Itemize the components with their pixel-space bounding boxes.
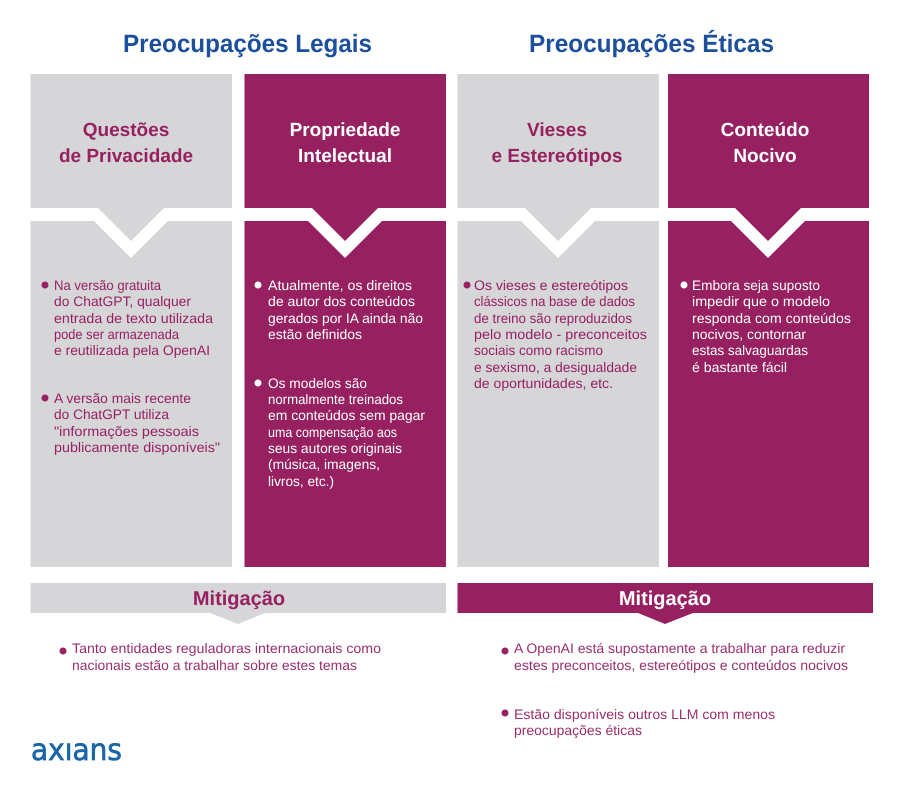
logo: axians: axians: [31, 733, 122, 768]
text block: ethical mitigation: estes preconceitos, estereótipos e conteúdos nocivos: [514, 658, 848, 673]
text block: intellectual property bullets: de autor dos conteúdos: [268, 294, 415, 309]
text block: legal mitigation: Tanto entidades reguladoras internacionais como: [72, 641, 381, 656]
panel: privacy issues: [30, 74, 232, 567]
text block: legal mitigation: [60, 641, 381, 673]
panel: biases and stereotypes: [458, 74, 659, 567]
text block: privacy bullets: pode ser armazenada: [54, 327, 179, 342]
title: legal concerns: Preocupações Legais: [123, 30, 372, 58]
text block: privacy bullets: "informações pessoais: [54, 424, 199, 439]
text block: harmful content bullets: impedir que o modelo: [692, 294, 830, 309]
heading: biases and stereotypes: e Estereótipos: [492, 146, 622, 167]
text block: intellectual property bullets: em conteúdos sem pagar: [268, 408, 425, 423]
text block: privacy bullets: do ChatGPT utiliza: [54, 407, 169, 422]
text block: intellectual property bullets: Atualmente, os direitos: [268, 278, 412, 293]
text block: biases bullets: pelo modelo - preconceitos: [474, 327, 647, 342]
text block: biases bullets: [464, 278, 647, 391]
text block: biases bullets: Os vieses e estereótipos: [474, 278, 628, 293]
text block: privacy bullets: publicamente disponíveis": [54, 440, 220, 455]
text block: intellectual property bullets: uma compensação aos: [268, 425, 397, 440]
text block: intellectual property bullets: gerados por IA ainda não: [268, 311, 423, 326]
text block: privacy bullets: [42, 278, 220, 455]
text block: intellectual property bullets: normalmente treinados: [268, 392, 403, 407]
text block: harmful content bullets: estas salvaguardas: [692, 343, 808, 358]
text block: intellectual property bullets: seus autores originais: [268, 441, 402, 456]
text block: ethical mitigation: preocupações éticas: [514, 723, 642, 738]
heading: intellectual property: Propriedade: [290, 120, 400, 141]
text block: intellectual property bullets: livros, etc.): [268, 474, 334, 489]
text block: biases bullets: de oportunidades, etc.: [474, 376, 613, 391]
text block: ethical mitigation: Estão disponíveis outros LLM com menos: [514, 707, 775, 722]
text block: ethical mitigation: A OpenAI está supostamente a trabalhar para reduzir: [514, 641, 845, 656]
text block: intellectual property bullets: Os modelos são: [268, 376, 367, 391]
heading: privacy issues: de Privacidade: [59, 146, 193, 167]
text block: privacy bullets: do ChatGPT, qualquer: [54, 294, 191, 309]
heading: biases and stereotypes: Vieses: [527, 120, 587, 141]
banner: legal mitigation: Mitigação: [193, 588, 285, 610]
text block: biases bullets: clássicos na base de dados: [474, 294, 635, 309]
text block: harmful content bullets: [680, 278, 851, 375]
text block: intellectual property bullets: estão definidos: [268, 327, 362, 342]
text block: biases bullets: de treino são reproduzidos: [474, 311, 632, 326]
banner: ethical mitigation: Mitigação: [619, 588, 711, 610]
banner: legal mitigation: [30, 583, 446, 624]
banner: ethical mitigation: [458, 583, 873, 624]
heading: intellectual property: Intelectual: [298, 146, 392, 167]
text block: privacy bullets: entrada de texto utilizada: [54, 311, 213, 326]
text block: harmful content bullets: é bastante fácil: [692, 360, 787, 375]
text block: intellectual property bullets: [254, 278, 425, 489]
panel: harmful content: [668, 74, 869, 567]
panel: intellectual property: [244, 74, 446, 567]
text block: privacy bullets: Na versão gratuita: [54, 278, 161, 293]
text block: ethical mitigation: [502, 641, 848, 738]
text block: privacy bullets: A versão mais recente: [54, 391, 191, 406]
heading: privacy issues: Questões: [83, 120, 169, 141]
text block: harmful content bullets: responda com conteúdos: [692, 311, 851, 326]
heading: harmful content: Conteúdo: [721, 120, 809, 141]
text block: privacy bullets: e reutilizada pela OpenAI: [54, 343, 210, 358]
heading: harmful content: Nocivo: [733, 146, 797, 167]
text block: legal mitigation: nacionais estão a trabalhar sobre estes temas: [72, 658, 357, 673]
text block: harmful content bullets: Embora seja suposto: [692, 278, 820, 293]
text block: biases bullets: e sexismo, a desigualdade: [474, 360, 637, 375]
text block: biases bullets: sociais como racismo: [474, 343, 603, 358]
text block: harmful content bullets: nocivos, contornar: [692, 327, 806, 342]
text block: intellectual property bullets: (música, imagens,: [268, 457, 380, 472]
title: ethical concerns: Preocupações Éticas: [529, 29, 774, 58]
